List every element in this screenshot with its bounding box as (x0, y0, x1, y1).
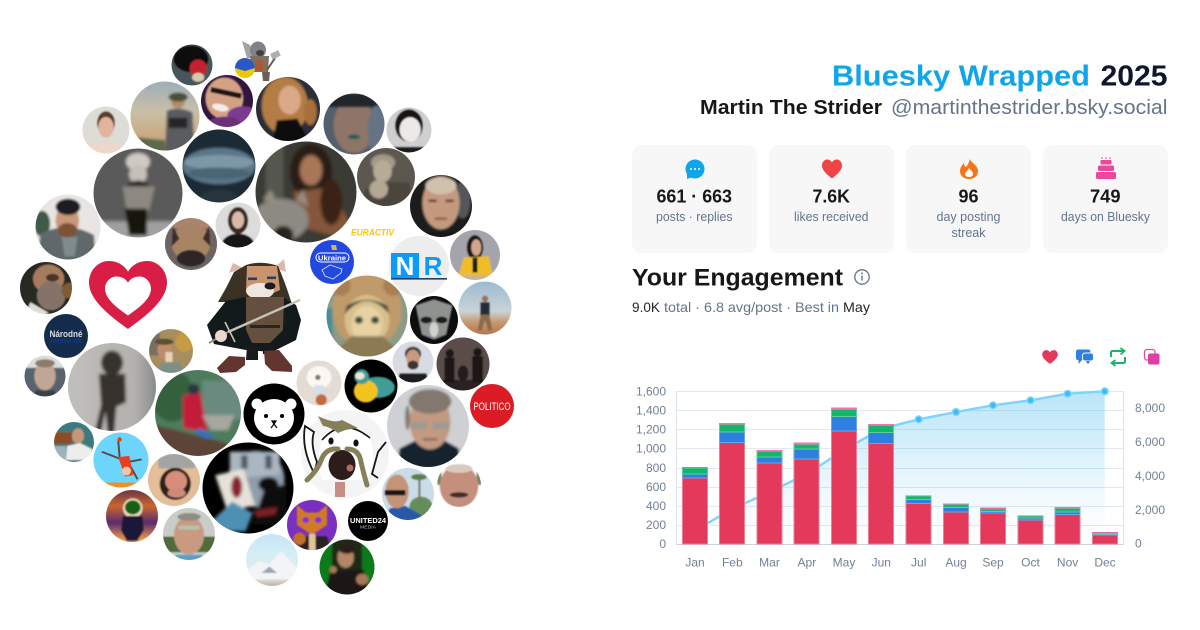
month labels: May (833, 556, 855, 570)
avatar: sepia thinking man (357, 148, 415, 206)
stat card: likes received: 7.6K (812, 186, 850, 206)
engagement summary: total · 6.8 avg/post · Best in (664, 299, 839, 315)
avatar: man with puffed cheeks (155, 500, 223, 568)
avatar: NR logo (389, 236, 449, 296)
left axis labels (636, 384, 666, 551)
avatar: woman with teal lips (324, 94, 384, 154)
left axis labels: 200 (646, 518, 666, 532)
avatar: man with moustache (437, 464, 481, 507)
icon: flame (960, 159, 978, 179)
stat card: day posting streak (906, 145, 1031, 253)
avatar: raccoon mask (410, 296, 458, 344)
avatar: man in hat overlooking valley (130, 82, 200, 150)
stat card: days on Bluesky (1043, 145, 1168, 253)
stat card: posts and replies: posts · replies (656, 209, 733, 224)
stat card: day posting streak: day posting (936, 209, 1000, 224)
avatar: cartwheel cartoon on blue (94, 432, 148, 488)
avatar: pale woman (82, 106, 130, 154)
left axis labels: 1,400 (636, 404, 666, 418)
month labels: Feb (722, 556, 743, 570)
avatar: man in desert (458, 282, 512, 334)
right axis labels: 4,000 (1135, 469, 1165, 483)
bars: quotes (682, 408, 1118, 533)
avatar: white bear on black (244, 384, 304, 444)
heading: Your Engagement: Your Engagement (632, 264, 843, 292)
right axis labels: 2,000 (1135, 503, 1165, 517)
month labels: Nov (1057, 556, 1078, 570)
right axis labels: 8,000 (1135, 401, 1165, 415)
cumulative area (695, 391, 1105, 544)
avatar: man in black beanie (36, 194, 100, 260)
avatar: man with glasses, grey hair (387, 385, 469, 467)
avatar: woman with wolf (256, 142, 356, 242)
avatar cluster (12, 38, 519, 603)
left axis labels: 600 (646, 480, 666, 494)
avatar: woman in yellow blazer (450, 230, 500, 280)
month labels: Oct (1021, 556, 1040, 570)
bars: reposts (682, 410, 1118, 534)
avatar: strange pink creature (148, 454, 200, 506)
month labels: Jan (685, 556, 705, 570)
avatar: parrot on black (344, 360, 398, 412)
chart: engagement by month (636, 384, 1165, 570)
avatar: POLITICO logo (470, 384, 514, 428)
avatar: old bearded man (20, 262, 72, 314)
month labels: Sep (982, 556, 1004, 570)
stat card: days on Bluesky: 749 (1090, 186, 1120, 206)
central figure: dog-headed warrior (207, 259, 301, 373)
avatar: blonde woman (256, 77, 320, 141)
avatar: man in sunglasses by palms (382, 468, 434, 520)
avatar: Národné menu logo: Národné (50, 329, 82, 339)
icon: birthday cake (1096, 157, 1116, 179)
avatar: pomeranian with badge (296, 360, 342, 406)
avatar: UNITED24 Media logo: UNITED24 (350, 518, 386, 525)
stat card: day posting streak: streak (952, 225, 986, 240)
month labels: Mar (759, 556, 780, 570)
avatar: speaker with microphone (320, 540, 374, 594)
avatar: NR logo: R (424, 251, 443, 281)
cumulative points (915, 388, 1108, 423)
avatar: snowy mountain (246, 534, 298, 586)
avatar: moustached cartoon dog (301, 410, 389, 498)
left axis labels: 0 (659, 537, 666, 551)
avatar: night stadium crowd (182, 130, 256, 202)
icon: reposts (1111, 348, 1125, 366)
avatar: shadow on wall (68, 343, 156, 431)
icon: replies (1076, 350, 1094, 364)
icon: heart (822, 160, 842, 178)
avatar: smiling man with glasses (201, 75, 253, 127)
right axis labels: 6,000 (1135, 435, 1165, 449)
avatar: astronaut in space (106, 490, 158, 542)
stat card: posts and replies (632, 145, 757, 253)
left axis labels: 1,600 (636, 384, 666, 398)
avatar: smiling woman in white (54, 422, 94, 462)
avatar: anime girl in bear hood (326, 276, 408, 356)
right axis labels: 0 (1135, 536, 1142, 550)
avatar: Ukraine logo: Ukraine (318, 254, 346, 262)
left axis labels: 1,200 (636, 422, 666, 436)
avatar: bearded man with glasses (392, 342, 434, 382)
avatar: french bulldog (165, 218, 217, 270)
left axis labels: 1,000 (636, 442, 666, 456)
bars: likes (682, 431, 1118, 544)
icon: big heart (89, 261, 167, 329)
avatar: man in red jacket by lake (155, 370, 241, 456)
month labels: Dec (1094, 556, 1116, 570)
icon: quotes (1144, 350, 1160, 364)
avatar: warrior sticker with Ukrainian ball (235, 41, 281, 81)
avatar: cartoon orange cat (287, 500, 337, 552)
avatar: soldiers silhouette (436, 338, 490, 390)
legend icons (1042, 348, 1160, 366)
avatar: Ukraine logo (310, 240, 354, 284)
profile name and handle: @martinthestrider.bsky.social (891, 97, 1168, 119)
stat card: likes received: likes received (794, 209, 868, 224)
title: 2025 (1100, 60, 1168, 92)
profile name and handle (700, 97, 1168, 119)
stat card: days on Bluesky: days on Bluesky (1061, 209, 1150, 224)
month labels (685, 556, 1116, 570)
avatar: black and white woman (386, 108, 432, 152)
avatar: Národné menu logo (44, 314, 88, 358)
cumulative line (695, 391, 1105, 530)
engagement summary: May (843, 299, 870, 315)
avatar: NR logo: N (396, 251, 414, 281)
avatar: woman in black suit (216, 202, 260, 248)
logo: EURACTIV: EURACTIV (351, 228, 395, 238)
engagement summary: 9.0K (632, 299, 661, 315)
avatar: girl in beanie, black and white (94, 148, 182, 238)
month labels: Apr (797, 556, 816, 570)
avatar: joker holding card (202, 442, 294, 534)
avatar: UNITED24 Media logo: MEDIA (360, 524, 376, 530)
stat card: posts and replies: 661 · 663 (656, 186, 732, 206)
title: Bluesky Wrapped (832, 60, 1090, 92)
avatar: red mask (172, 44, 212, 86)
avatar: UNITED24 Media logo (348, 501, 388, 541)
month labels: Aug (945, 556, 967, 570)
month labels: Jul (911, 556, 926, 570)
avatar: pale bald face (410, 175, 472, 237)
grid lines and axes (676, 391, 1124, 544)
profile name and handle: Martin The Strider (700, 97, 882, 119)
stat card: day posting streak: 96 (958, 186, 978, 206)
avatar: man with beer (149, 329, 193, 373)
avatar: blond man portrait (24, 356, 66, 396)
month labels: Jun (872, 556, 891, 570)
bars: replies (682, 416, 1118, 535)
left axis labels: 400 (646, 499, 666, 513)
left axis labels: 800 (646, 461, 666, 475)
icon: likes (1042, 350, 1058, 364)
right axis labels (1135, 401, 1165, 550)
avatar: Národné menu logo: menu.sk (50, 338, 82, 345)
icon: info (855, 270, 869, 284)
stat card: likes received (769, 145, 894, 253)
avatar: POLITICO logo: POLITICO (474, 401, 511, 413)
icon: chat bubble (686, 160, 704, 179)
